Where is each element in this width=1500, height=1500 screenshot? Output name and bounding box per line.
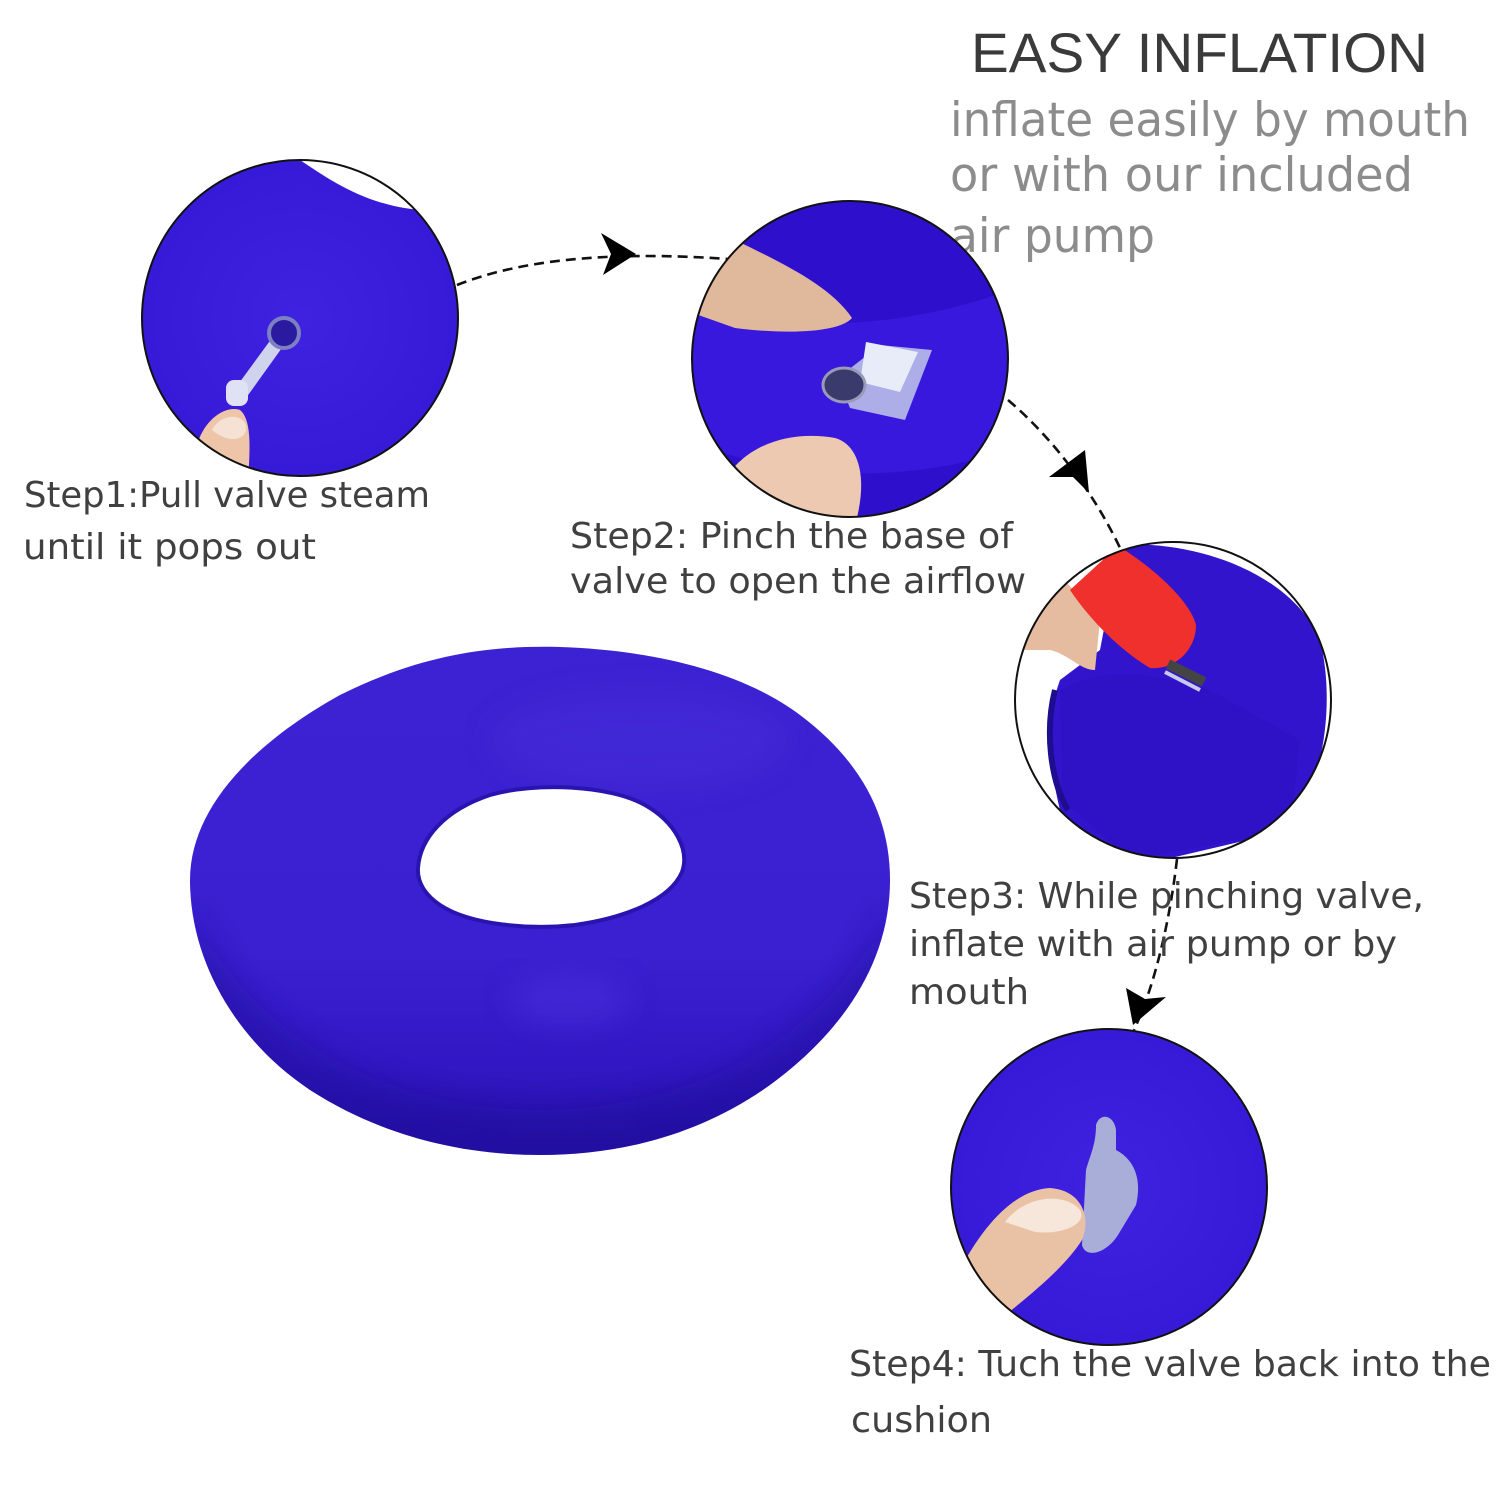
step 1 photo circle [140, 158, 470, 480]
title: EASY INFLATION [971, 21, 1428, 84]
subtitle text: inflate easily by mouth [950, 93, 1470, 148]
step 1 caption: until it pops out [23, 527, 316, 568]
hand [1024, 584, 1100, 670]
step 1 caption [23, 475, 430, 568]
step 4 caption: cushion [851, 1400, 992, 1441]
arrow: step 3 to step 4 [1126, 859, 1177, 1030]
step 2 caption [570, 516, 1026, 602]
step 3 caption: inflate with air pump or by [909, 924, 1397, 965]
arrow: step 1 to step 2 [457, 233, 728, 285]
step 3 caption [909, 876, 1424, 1013]
bottom finger [735, 436, 862, 516]
finger [968, 1188, 1086, 1310]
step 3 caption: Step3: While pinching valve, [909, 876, 1424, 917]
step 2 caption: Step2: Pinch the base of [570, 516, 1014, 557]
step 4 caption: Step4: Tuch the valve back into the [849, 1344, 1491, 1385]
cushion shading [190, 690, 890, 1160]
donut cushion [190, 647, 890, 1160]
top finger [690, 240, 852, 332]
step 1 caption: Step1:Pull valve steam [24, 475, 430, 516]
valve [1082, 1117, 1138, 1253]
valve [848, 345, 932, 420]
red pump [1070, 546, 1196, 668]
step 4 photo circle [948, 1026, 1270, 1348]
step 3 caption: mouth [909, 972, 1029, 1013]
finger [199, 409, 250, 466]
subtitle text [950, 93, 1470, 264]
step 4 caption [849, 1344, 1491, 1441]
step 2 caption: valve to open the airflow [570, 561, 1026, 602]
step 2 photo circle [690, 200, 1012, 525]
cushion hole [418, 787, 684, 927]
arrow: step 2 to step 3 [1008, 400, 1121, 550]
valve stem [241, 342, 281, 396]
subtitle text: or with our included [950, 148, 1413, 203]
subtitle text: air pump [950, 209, 1155, 264]
step 3 photo circle [1012, 540, 1334, 870]
